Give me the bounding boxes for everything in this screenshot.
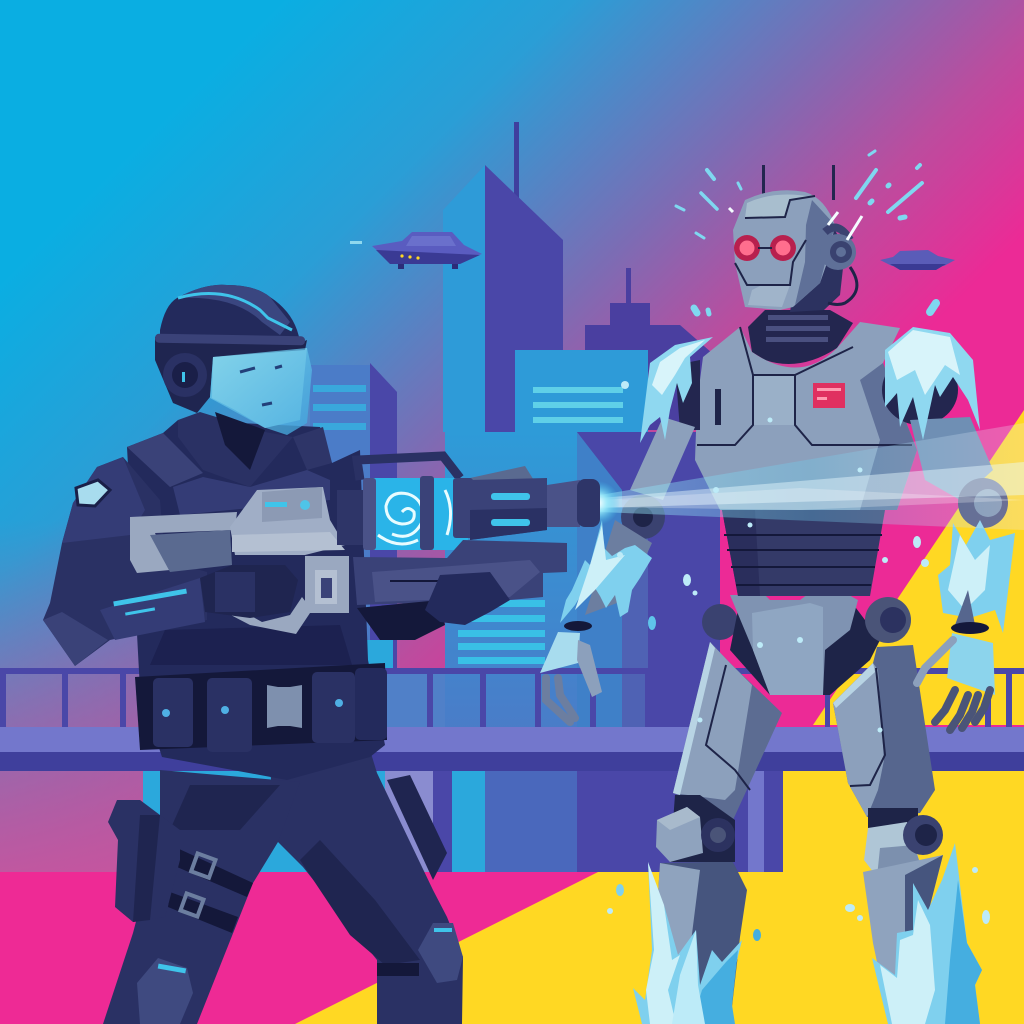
magazine box (305, 556, 349, 613)
robot abdomen (722, 510, 885, 596)
ice on right shin (872, 843, 982, 1024)
ice on robot right forearm (938, 520, 1015, 633)
flying ship right (880, 250, 955, 270)
soldier right arm (43, 457, 207, 666)
robot pelvis (702, 594, 911, 695)
rear thigh pouch (387, 775, 447, 880)
robot right hand (917, 622, 995, 730)
barrel (470, 478, 547, 540)
ice sparks around robot head (676, 151, 936, 314)
left knee (656, 795, 735, 862)
trigger guard loop (225, 597, 312, 634)
flying ship left (350, 232, 482, 269)
knee pad rear (377, 923, 463, 983)
ice on robot left shoulder (640, 337, 713, 443)
city skyline (143, 122, 748, 872)
stock (130, 512, 237, 573)
robot right arm (882, 355, 1008, 528)
belt with pouches (135, 663, 387, 752)
soldier (43, 412, 463, 1024)
ice on robot left forearm (560, 520, 652, 623)
top handle (357, 456, 535, 490)
robot head (729, 165, 862, 312)
robot legs (650, 642, 960, 1024)
front leg (103, 770, 300, 1024)
ice droplets around robot (607, 381, 990, 941)
soldier left arm and hand (357, 600, 445, 640)
freeze gun (130, 456, 600, 640)
freeze beam (576, 423, 1024, 530)
right knee (864, 808, 943, 877)
right shin (863, 855, 960, 1024)
right thigh (833, 645, 935, 817)
torso (127, 420, 385, 780)
knee pad front (137, 958, 193, 1024)
robot left hand (540, 621, 602, 722)
robot left arm (585, 360, 700, 615)
yellow and magenta ground planes (0, 410, 1024, 1024)
robot neck (748, 310, 853, 364)
soldier head and helmet (155, 285, 312, 435)
left shin (650, 862, 747, 1024)
left thigh (673, 642, 782, 820)
bridge with railing (0, 668, 1024, 872)
cylinder (337, 490, 367, 545)
holster and thigh straps (108, 800, 253, 933)
robot chest armour (695, 322, 917, 510)
ice on robot right shoulder (885, 327, 980, 440)
receiver (230, 487, 345, 555)
lower rail (353, 540, 567, 605)
ice on left shin (633, 862, 742, 1024)
back leg (270, 750, 463, 1024)
soldier right hand (200, 565, 298, 618)
